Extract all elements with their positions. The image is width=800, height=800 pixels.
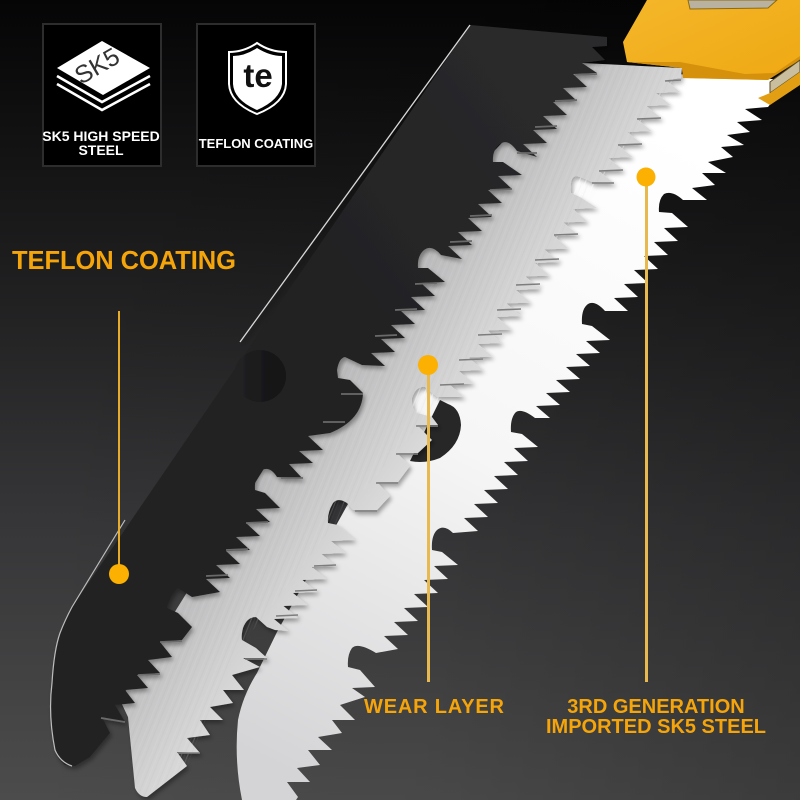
marker dot	[636, 168, 656, 186]
label: WEAR LAYER	[364, 696, 505, 718]
badge: SK5 high speed steel: STEEL	[78, 142, 124, 158]
marker dot	[109, 564, 129, 584]
badge label: TEFLON COATING	[199, 136, 313, 151]
callout: Teflon coating: TEFLON COATING	[12, 247, 236, 275]
silver wear layer blade	[120, 63, 682, 797]
badge label: SK5 HIGH SPEED	[42, 128, 160, 144]
icon: te shield	[229, 43, 286, 114]
metal slot in handle	[688, 0, 777, 9]
icon: stacked SK5 steel plates: SK5	[70, 42, 125, 90]
callout: wear layer	[364, 355, 505, 718]
badge: Teflon coating	[197, 24, 315, 166]
badge: SK5 high speed steel	[42, 24, 161, 166]
white SK5 steel blade layer	[237, 70, 790, 800]
yellow handle	[623, 0, 800, 105]
round dimple in black blade	[234, 350, 286, 402]
label: IMPORTED SK5 STEEL	[546, 716, 766, 738]
leader line	[427, 365, 430, 682]
leader line	[118, 311, 120, 574]
handle lower facet	[627, 56, 800, 80]
label: 3RD GENERATION	[567, 696, 745, 718]
silver tooth shadow bars	[178, 80, 681, 753]
black Teflon-coated blade layer	[51, 25, 607, 766]
icon: stacked SK5 steel plates	[57, 41, 150, 110]
black tooth shadow bars	[101, 74, 597, 722]
callout: 3rd generation SK5 steel	[546, 168, 766, 738]
metal strip at handle base	[770, 60, 800, 93]
leader line	[645, 177, 648, 682]
marker dot	[418, 355, 438, 375]
callout: Teflon coating	[12, 247, 236, 584]
half-moon slot through the white layer	[410, 400, 461, 462]
icon: te shield: te	[243, 57, 273, 94]
blade edge highlight	[240, 25, 470, 342]
yellow strip below metal	[758, 72, 800, 105]
